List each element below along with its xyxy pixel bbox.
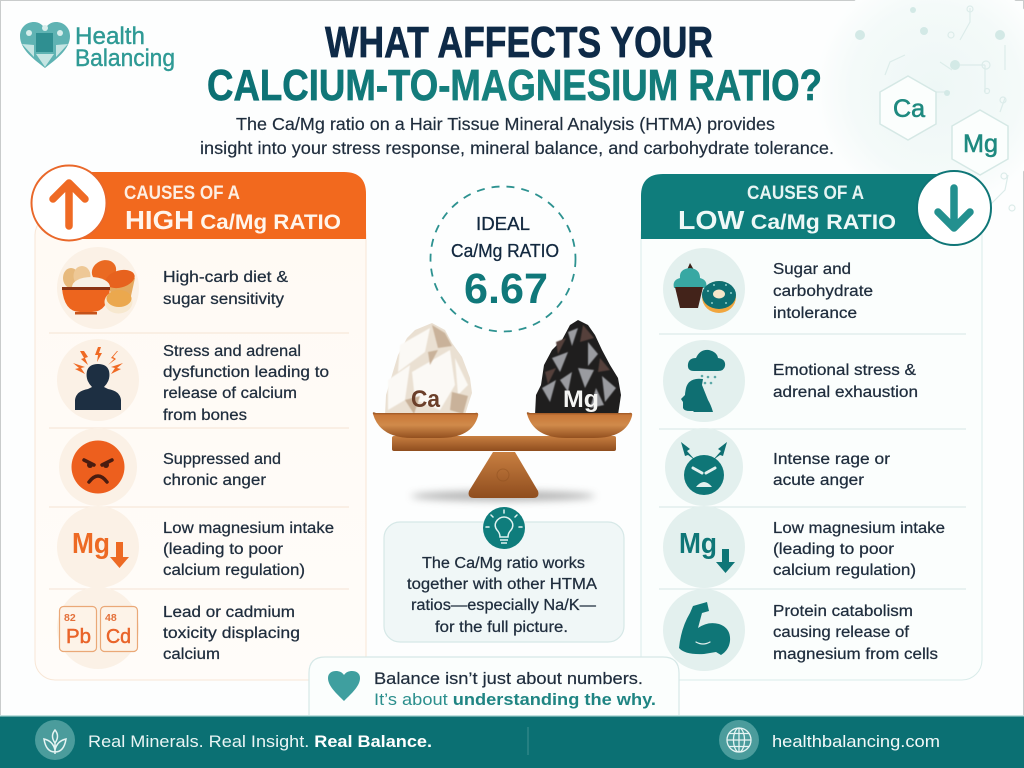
icon: stressed person (73, 347, 123, 410)
fulcrum (469, 452, 538, 498)
logo: Health Balancing: Health (75, 23, 145, 50)
title: WHAT AFFECTS YOUR (325, 18, 713, 67)
icon: heart (328, 671, 360, 701)
row: suppressed anger: Suppressed and (163, 451, 281, 468)
row: high-carb diet: High-carb diet & (163, 269, 289, 286)
icon: up arrow (32, 166, 106, 240)
balance scale with Ca and Mg rocks (373, 320, 632, 501)
row: low magnesium intake (57, 506, 334, 588)
info box: other HTMA ratios: The Ca/Mg ratio works (422, 555, 585, 572)
row: low magnesium intake: calcium regulation) (773, 562, 916, 579)
callout: balance message (309, 657, 679, 717)
panel header: high ratio (70, 172, 366, 239)
row: suppressed anger: chronic anger (163, 472, 266, 489)
hexagon: Ca (880, 76, 936, 140)
icon: globe (719, 720, 759, 760)
icon: leaf (35, 720, 75, 760)
icon: puzzle heart (20, 22, 70, 68)
icon: raging face (681, 442, 727, 495)
row: stress and adrenal dysfunction: Stress and adrenal (163, 343, 301, 360)
icon: Pb and Cd tiles: Cd (106, 626, 131, 648)
icon: head under rain cloud (681, 350, 725, 412)
row: low magnesium intake: Low magnesium intake (773, 520, 945, 537)
left bowl (373, 412, 478, 438)
row: lead or cadmium toxicity: toxicity displacing (163, 625, 300, 642)
beam (392, 436, 616, 451)
icon: Mg down: Mg (72, 528, 110, 560)
row: sugar intolerance: carbohydrate (773, 283, 873, 300)
row: high-carb diet: sugar sensitivity (163, 291, 284, 308)
icon: Pb and Cd tiles: Pb (66, 626, 91, 648)
row: protein catabolism: magnesium from cells (773, 646, 938, 663)
icon: Pb and Cd tiles (60, 606, 138, 652)
row: stress and adrenal dysfunction: dysfunction leading to (163, 364, 329, 381)
icon: Mg down (679, 528, 735, 573)
row: suppressed anger (59, 428, 281, 506)
row: protein catabolism: causing release of (773, 624, 910, 641)
row: protein catabolism: Protein catabolism (773, 603, 913, 620)
panel header: high ratio: HIGH Ca/Mg RATIO (125, 205, 341, 235)
subtitle: insight into your stress response, mineral balance, and carbohydrate tolerance. (200, 138, 834, 158)
row: lead or cadmium toxicity: Lead or cadmium (163, 604, 295, 621)
ideal ratio dashed circle (430, 186, 576, 332)
footer band: Real Minerals. Real Insight. Real Balance. (88, 732, 432, 751)
row: low magnesium intake (663, 506, 945, 588)
row: low magnesium intake: Low magnesium intake (163, 520, 334, 537)
logo: Health Balancing: Balancing (75, 45, 175, 72)
rock: calcium (385, 323, 472, 415)
row: high-carb diet (57, 247, 289, 329)
icon: Pb and Cd tiles: 82 (64, 612, 76, 624)
row: intense rage: acute anger (773, 472, 864, 489)
panel header: low ratio: LOW Ca/Mg RATIO (678, 205, 896, 235)
hexagon: Ca: Ca (893, 95, 925, 123)
subtitle (200, 114, 834, 158)
callout: balance message: It’s about understanding the why. (374, 690, 656, 709)
row: stress and adrenal dysfunction: release of calcium (163, 385, 297, 402)
icon: Mg down: Mg (679, 528, 717, 560)
row: low magnesium intake: (leading to poor (773, 541, 894, 558)
ideal ratio dashed circle: 6.67 (464, 265, 548, 313)
row: low magnesium intake: (leading to poor (163, 541, 283, 558)
row: stress and adrenal dysfunction (57, 339, 329, 424)
icon: cupcake and donut (674, 263, 736, 313)
panel header: low ratio (641, 174, 960, 239)
row: emotional stress: adrenal exhaustion (773, 384, 918, 401)
row: sugar intolerance (663, 248, 873, 330)
logo: Health Balancing (20, 22, 175, 72)
icon: down arrow (917, 171, 991, 245)
row: low magnesium intake: calcium regulation) (163, 562, 305, 579)
info box: other HTMA ratios: ratios—especially Na/K— (411, 597, 597, 614)
subtitle: The Ca/Mg ratio on a Hair Tissue Mineral Analysis (HTMA) provides (236, 114, 775, 134)
panel: causes of a low Ca/Mg ratio (641, 171, 991, 680)
icon: flexed bicep (679, 602, 730, 655)
callout: balance message: Balance isn’t just about numbers. (374, 669, 643, 688)
hexagon: Mg: Mg (963, 130, 998, 158)
panel: causes of a high Ca/Mg ratio (32, 166, 366, 680)
title (207, 18, 822, 110)
ideal ratio dashed circle: IDEAL (476, 214, 530, 234)
row: emotional stress (663, 340, 918, 422)
molecule decoration with Ca and Mg hexagons (855, 6, 1015, 211)
footer band: healthbalancing.com (772, 732, 940, 751)
row: lead or cadmium toxicity (57, 587, 300, 669)
rock: calcium: Ca (411, 386, 441, 413)
title: CALCIUM-TO-MAGNESIUM RATIO? (207, 61, 822, 110)
row: intense rage: Intense rage or (773, 451, 890, 468)
right bowl (527, 412, 632, 438)
row: intense rage (665, 428, 890, 506)
icon: bread and bowl (62, 256, 137, 314)
ideal ratio dashed circle: Ca/Mg RATIO (451, 241, 559, 261)
row: lead or cadmium toxicity: calcium (163, 646, 220, 663)
icon: angry face (72, 440, 124, 494)
info box: other HTMA ratios: together with other HTMA (407, 576, 598, 593)
row: sugar intolerance: intolerance (773, 305, 857, 322)
rock: magnesium: Mg (563, 386, 599, 413)
panel header: high ratio: CAUSES OF A (124, 183, 240, 204)
footer band (0, 715, 1024, 768)
rock: magnesium (535, 320, 621, 415)
row: protein catabolism (663, 589, 938, 671)
row: sugar intolerance: Sugar and (773, 261, 851, 278)
icon: light bulb (483, 507, 525, 549)
panel header: low ratio: CAUSES OF A (747, 183, 864, 204)
info box: other HTMA ratios (384, 507, 624, 642)
hexagon: Mg (952, 110, 1008, 175)
icon: Mg down (72, 528, 129, 568)
icon: Pb and Cd tiles: 48 (105, 612, 117, 624)
info box: other HTMA ratios: for the full picture. (435, 619, 568, 636)
row: stress and adrenal dysfunction: from bones (163, 407, 247, 424)
row: emotional stress: Emotional stress & (773, 362, 917, 379)
